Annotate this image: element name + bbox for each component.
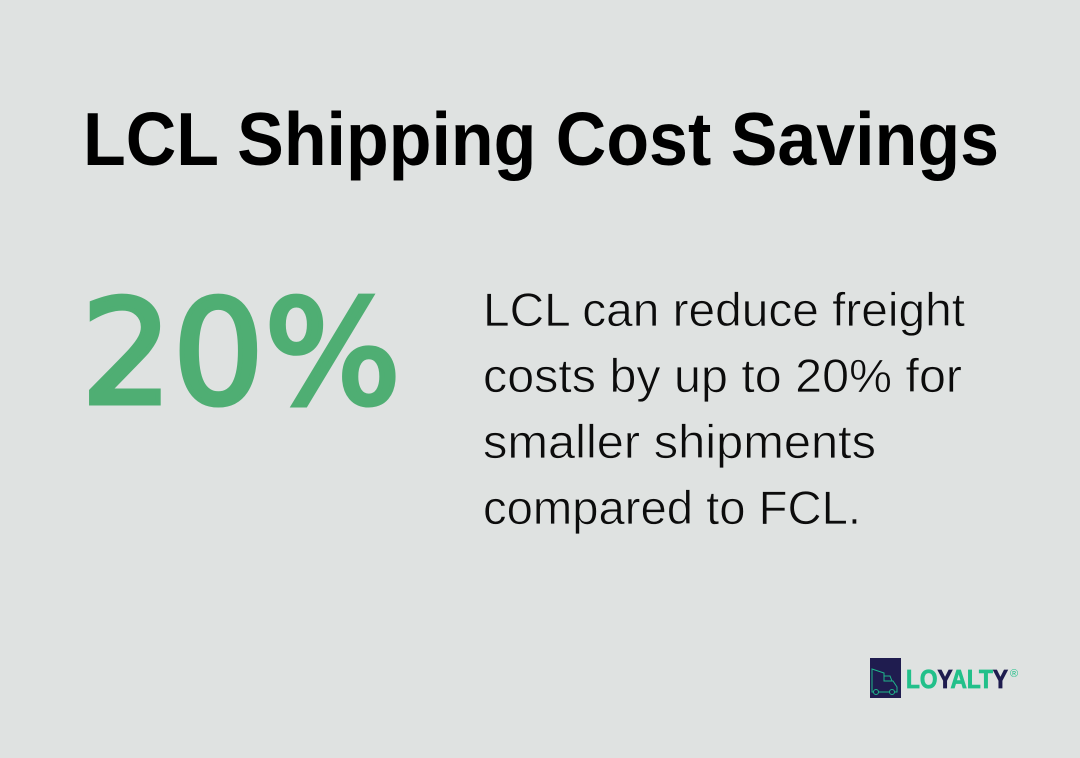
logo wordmark: LOYALTY xyxy=(906,664,1008,694)
description text xyxy=(483,283,965,534)
title: LCL Shipping Cost Savings xyxy=(83,97,999,181)
description text: smaller shipments xyxy=(483,415,876,468)
icon: truck badge xyxy=(870,658,901,698)
description text: costs by up to 20% for xyxy=(483,349,962,402)
registered mark: ® xyxy=(1010,668,1018,680)
description text: LCL can reduce freight xyxy=(483,283,965,336)
description text: compared to FCL. xyxy=(483,481,861,534)
logo: Loyalty xyxy=(870,658,1018,698)
big stat: 20%: 20% xyxy=(81,269,401,437)
